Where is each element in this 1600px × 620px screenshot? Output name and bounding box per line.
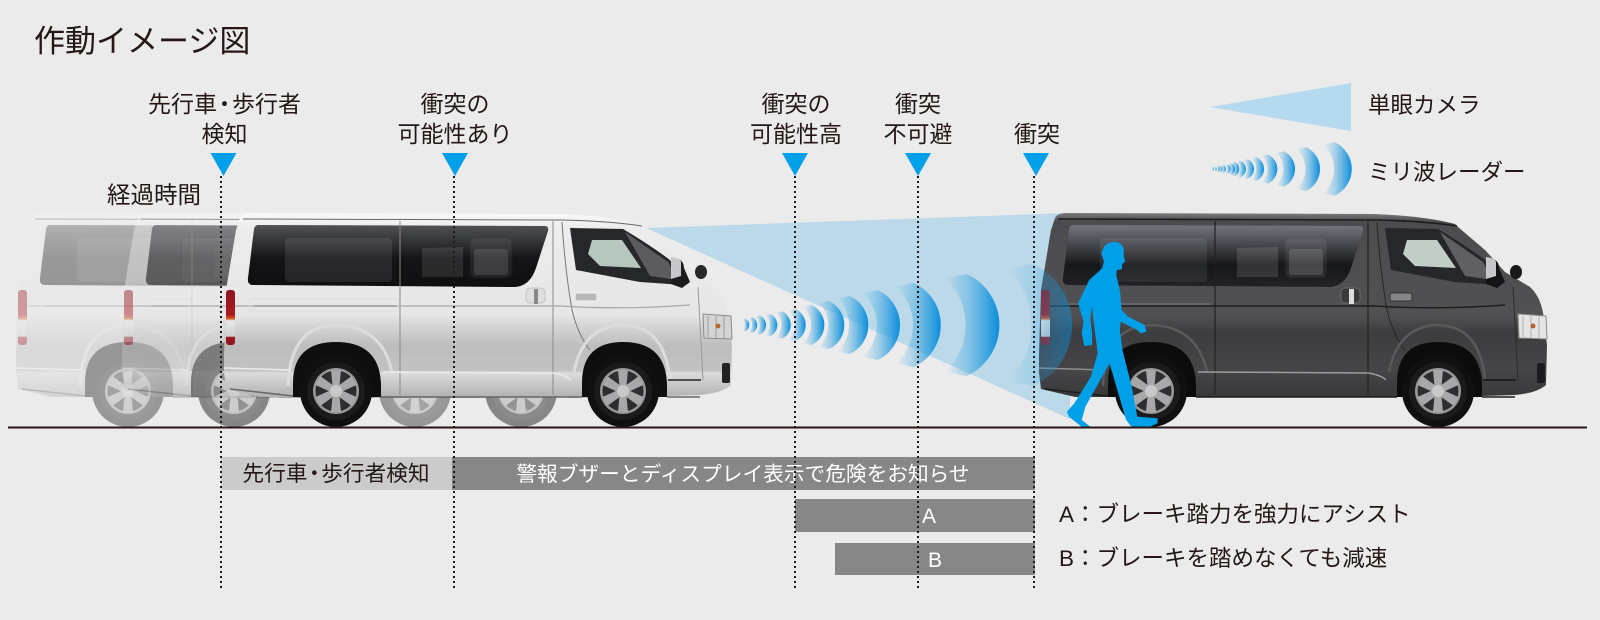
timeline bar: warning: 警報ブザーとディスプレイ表示で危険をお知らせ: [516, 462, 970, 486]
timeline bar: A: [795, 499, 1035, 532]
vehicle ahead: dark van: [1039, 213, 1547, 427]
label: collision possible: 可能性あり: [398, 121, 512, 147]
label: collision: 衝突: [1014, 121, 1060, 147]
ghost van: middle position: [122, 213, 630, 427]
lead vehicle: silver van: [224, 213, 732, 427]
timeline bar: B: [835, 543, 1035, 575]
ground line: [8, 426, 1587, 428]
timeline bar: A: A: [922, 505, 936, 528]
marker triangles: [210, 153, 1049, 176]
timeline bar: detection: 先行車・歩行者検知: [242, 461, 430, 486]
legend: monocular camera: [1210, 83, 1481, 131]
camera beam: [646, 213, 1070, 419]
label: collision possible: 衝突の: [420, 91, 490, 117]
timeline bar: B: B: [928, 549, 942, 572]
label: elapsed time: 経過時間: [107, 182, 201, 208]
description B: B：ブレーキを踏めなくても減速: [1059, 546, 1387, 571]
ghost van: earliest position: [16, 213, 524, 427]
timeline bar: detection: [221, 457, 452, 490]
dotted timing lines: [221, 176, 1034, 588]
legend: millimetre-wave radar: [1212, 142, 1526, 196]
legend: millimetre-wave radar: ミリ波レーダー: [1368, 160, 1526, 185]
description A: A：ブレーキ踏力を強力にアシスト: [1059, 502, 1411, 527]
label: collision unavoidable: 衝突: [895, 91, 941, 117]
label: collision likely: 可能性高: [750, 121, 842, 147]
millimetre-wave radar pulses: [743, 264, 1072, 386]
pedestrian silhouette: [1067, 242, 1158, 428]
label: detection: 先行車・歩行者: [148, 91, 301, 117]
timeline bar: warning: [452, 457, 1035, 490]
label: detection: 検知: [202, 121, 248, 147]
legend: monocular camera: 単眼カメラ: [1368, 93, 1481, 118]
title: 作動イメージ図: [34, 24, 250, 59]
label: collision unavoidable: 不可避: [884, 121, 952, 147]
label: collision likely: 衝突の: [762, 91, 830, 117]
